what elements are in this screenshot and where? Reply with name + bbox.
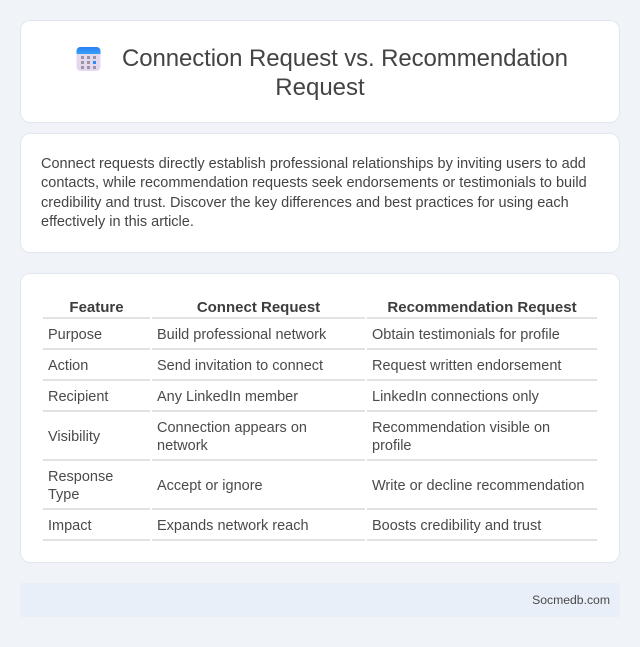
panel: intro text card [20,133,620,253]
row: Impact: Expands network reach [157,518,309,534]
row: Action: Send invitation to connect [157,358,323,374]
table header: Connect Request [197,299,320,316]
footer text: Socmedb.com [532,593,610,607]
row: Visibility: Connection appears on [157,420,307,436]
table header [69,299,577,316]
comparison table [43,299,597,541]
row: Impact [48,518,542,534]
row: Purpose [48,327,560,343]
row: Response Type: Type [48,487,79,503]
row: Response Type: Write or decline recommendation [372,478,584,494]
row: Action [48,358,562,374]
row: Visibility: network [157,438,208,454]
row: Purpose: Purpose [48,327,102,343]
row: Response Type: Response [48,469,113,485]
row: Recipient: Any LinkedIn member [157,389,298,405]
row: Impact: Boosts credibility and trust [372,518,541,534]
row: Impact: Impact [48,518,92,534]
row: Visibility [48,420,550,454]
intro paragraph [41,156,587,230]
row: Recipient: LinkedIn connections only [372,389,539,405]
row: Visibility: Recommendation visible on [372,420,550,436]
row: Response Type [48,469,584,503]
panel: comparison table card [20,273,620,563]
intro paragraph: credibility and trust. Discover the key differences and best practices for using each [41,194,569,210]
panel: title card [20,20,620,123]
row: Response Type: Accept or ignore [157,478,263,494]
row: Recipient: Recipient [48,389,108,405]
row: Visibility: profile [372,438,412,454]
intro paragraph: effectively in this article. [41,214,194,230]
intro paragraph: Connect requests directly establish professional relationships by inviting users to add [41,156,586,172]
footer bar [20,583,620,617]
row: Purpose: Build professional network [157,327,326,343]
row: Recipient [48,389,539,405]
table header: Recommendation Request [387,299,577,316]
row: Purpose: Obtain testimonials for profile [372,327,560,343]
title [122,45,568,101]
title: Request [275,74,365,101]
intro paragraph: contacts, while recommendation requests seek endorsements or testimonials to build [41,175,587,191]
row: Action: Action [48,358,88,374]
row: Action: Request written endorsement [372,358,561,374]
row: Visibility: Visibility [48,429,100,445]
title: Connection Request vs. Recommendation [122,45,568,72]
icon: calendar [76,47,100,71]
table header: Feature [69,299,124,316]
